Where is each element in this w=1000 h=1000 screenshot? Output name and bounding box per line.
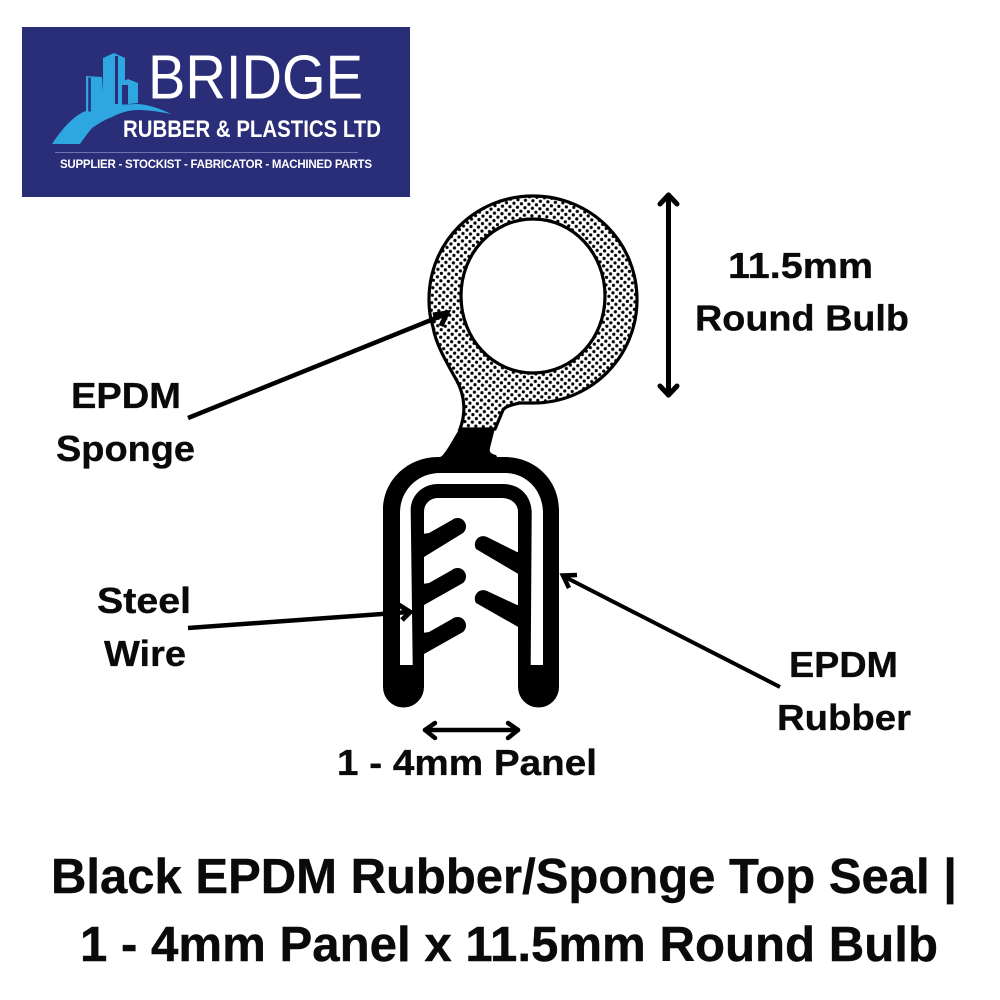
label: steel wire: Steel: [97, 580, 191, 621]
logo wordmark: BRIDGE: [148, 44, 363, 112]
arrow: panel width: [425, 723, 518, 738]
title: Black EPDM Rubber/Sponge Top Seal |: [51, 850, 957, 904]
arrow: steel wire: [188, 605, 410, 628]
rubber stem: [430, 428, 500, 462]
label: EPDM sponge: EPDM: [71, 375, 181, 416]
arrow: bulb height: [660, 195, 677, 395]
steel wire core: [400, 473, 543, 665]
logo tagline: SUPPLIER - STOCKIST - FABRICATOR - MACHINED PARTS: [60, 159, 372, 171]
label: bulb size: [695, 245, 909, 338]
title: [51, 850, 957, 972]
title: 1 - 4mm Panel x 11.5mm Round Bulb: [80, 918, 938, 972]
arrow: EPDM rubber: [563, 575, 780, 687]
label: bulb size: 11.5mm: [728, 245, 873, 286]
sponge bulb: [429, 196, 637, 429]
label: steel wire: [97, 580, 191, 674]
label: bulb size: Round Bulb: [695, 298, 909, 338]
gripping fins left: [422, 518, 466, 654]
rubber U-channel: [383, 457, 559, 708]
label: panel range: 1 - 4mm Panel: [337, 742, 597, 783]
label: EPDM sponge: [56, 375, 195, 469]
icon: city skyline on bridge arc: [52, 53, 171, 144]
logo panel: [22, 27, 410, 197]
label: EPDM rubber: EPDM: [789, 644, 898, 685]
label: EPDM rubber: [777, 644, 911, 738]
label: EPDM sponge: Sponge: [56, 428, 195, 469]
seal cross-section diagram: [383, 196, 637, 708]
label: steel wire: Wire: [104, 633, 186, 674]
gripping fins right: [475, 536, 520, 628]
logo divider: [55, 152, 358, 153]
label: EPDM rubber: Rubber: [777, 697, 911, 738]
arrow: EPDM sponge: [188, 313, 447, 418]
logo subtitle: RUBBER & PLASTICS LTD: [123, 116, 381, 143]
